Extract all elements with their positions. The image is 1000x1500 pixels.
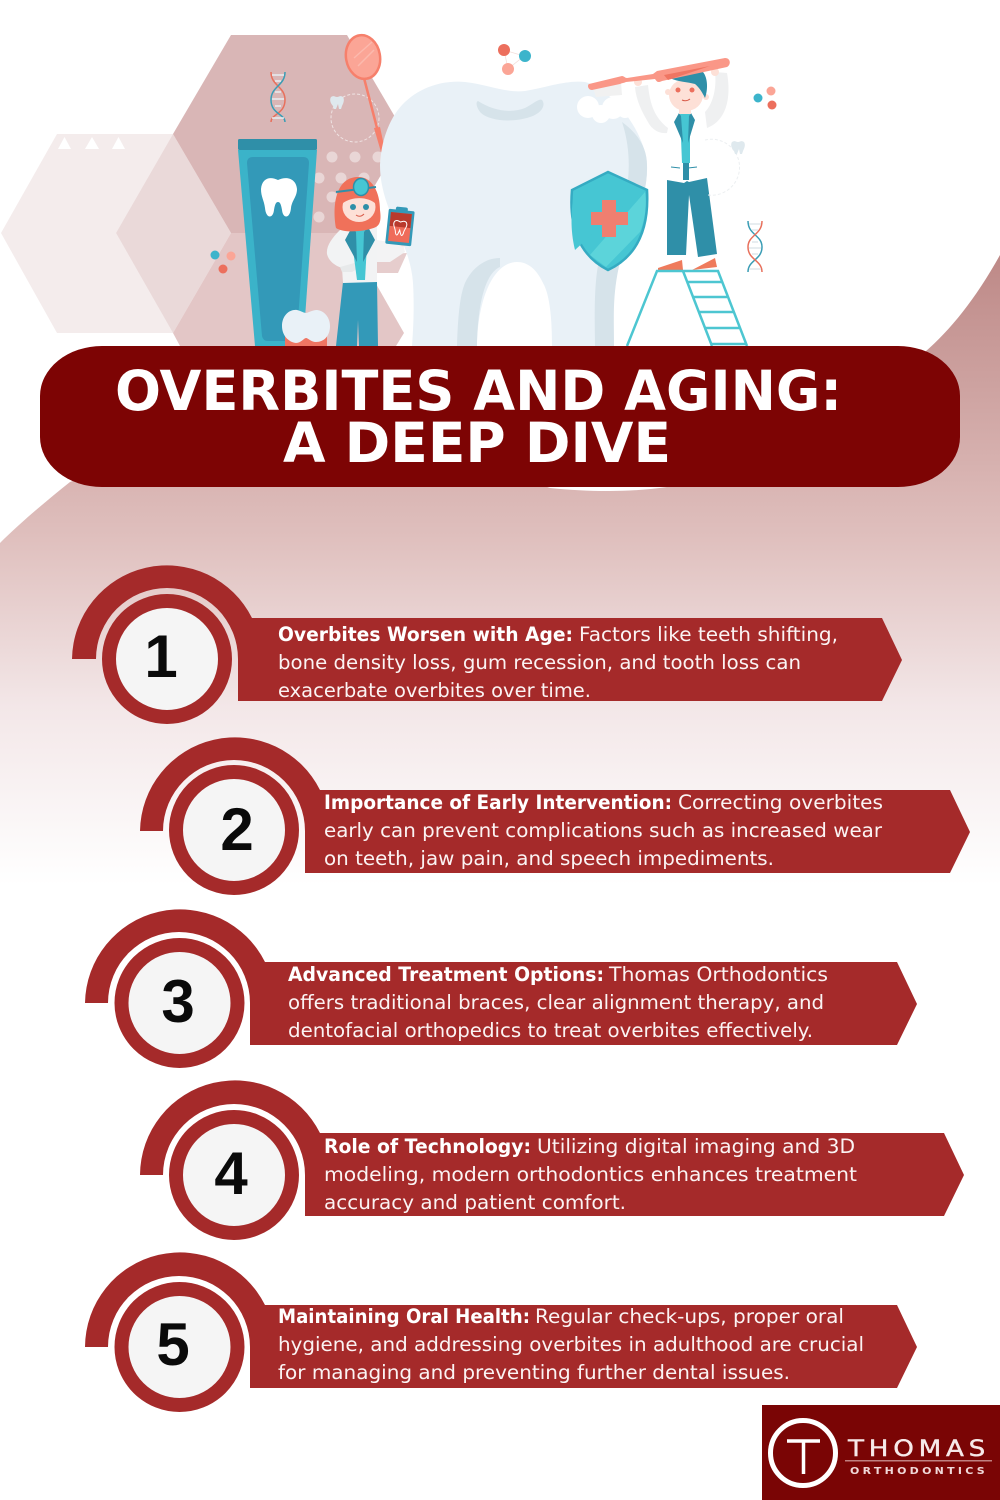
title banner xyxy=(40,346,960,487)
hands xyxy=(634,78,642,86)
step 5: 5 xyxy=(156,1311,190,1378)
step 3: 3 xyxy=(161,968,195,1035)
icon: clipboard with tooth xyxy=(385,206,415,246)
icon: dental mirror xyxy=(342,32,385,152)
toothbrush xyxy=(588,58,730,90)
illustration: giant tooth xyxy=(380,82,647,346)
coat sleeves xyxy=(635,85,668,133)
icon: small tooth at tube base xyxy=(282,310,330,346)
step 1: Overbites Worsen with Age: xyxy=(278,623,573,646)
step 1 xyxy=(72,565,902,717)
icon: dashed orbit with small tooth xyxy=(330,94,379,142)
step 4: accuracy and patient comfort. xyxy=(324,1191,626,1214)
step 3: dentofacial orthopedics to treat overbites effectively. xyxy=(288,1019,813,1042)
step 3: Advanced Treatment Options: xyxy=(288,963,604,986)
logo: Thomas Orthodontics xyxy=(762,1405,1000,1500)
step 3: offers traditional braces, clear alignment therapy, and xyxy=(288,991,824,1014)
icon: DNA right xyxy=(748,221,762,272)
ladder xyxy=(627,271,747,346)
icon: toothpaste tube xyxy=(238,139,317,346)
shoes xyxy=(658,258,717,270)
step 2: on teeth, jaw pain, and speech impediments. xyxy=(324,847,774,870)
step 4 xyxy=(140,1080,964,1233)
step 1: 1 xyxy=(144,623,178,690)
trousers xyxy=(667,178,717,257)
foam on tooth xyxy=(577,96,633,123)
step 4: Utilizing digital imaging and 3D xyxy=(537,1135,855,1158)
step 4: modeling, modern orthodontics enhances treatment xyxy=(324,1163,857,1186)
step 5: Maintaining Oral Health: xyxy=(278,1305,530,1328)
white curved top area xyxy=(0,0,1000,543)
title line 1: OVERBITES AND AGING: xyxy=(115,359,842,423)
step 2: 2 xyxy=(220,796,254,863)
step 2 xyxy=(140,737,970,888)
step 1: bone density loss, gum recession, and tooth loss can xyxy=(278,651,801,674)
hexagon backdrop xyxy=(1,35,407,346)
icon: DNA left xyxy=(271,72,285,122)
neck and face xyxy=(679,104,691,114)
step 1: exacerbate overbites over time. xyxy=(278,679,591,702)
icon: molecule left xyxy=(210,250,236,274)
step 4: 4 xyxy=(214,1140,248,1207)
step 4: Role of Technology: xyxy=(324,1135,531,1158)
step 3 xyxy=(85,909,917,1061)
illustration: dentist on ladder with toothbrush xyxy=(577,58,747,346)
step 5: for managing and preventing further dental issues. xyxy=(278,1361,790,1384)
rose gradient wash xyxy=(0,250,1000,890)
shirt and lapels xyxy=(680,113,690,163)
title line 2: A DEEP DIVE xyxy=(283,411,671,475)
icon: molecule right xyxy=(754,86,776,110)
step 3: Thomas Orthodontics xyxy=(608,963,828,986)
logo: Thomas Orthodontics: ORTHODONTICS xyxy=(850,1466,988,1477)
logo: Thomas Orthodontics: THOMAS xyxy=(847,1437,990,1462)
step 1: Factors like teeth shifting, xyxy=(579,623,838,646)
icon: shield with cross xyxy=(571,172,647,270)
step 2: Importance of Early Intervention: xyxy=(324,791,672,814)
bristles xyxy=(593,82,622,97)
step 5: Regular check-ups, proper oral xyxy=(535,1305,844,1328)
step 5: hygiene, and addressing overbites in adulthood are crucial xyxy=(278,1333,864,1356)
icon: molecule top xyxy=(498,44,531,75)
step 2: Correcting overbites xyxy=(678,791,883,814)
step 5 xyxy=(85,1252,917,1405)
step 2: early can prevent complications such as increased wear xyxy=(324,819,883,842)
illustration: female dentist xyxy=(327,177,406,346)
icon: dashed orbit right xyxy=(705,139,745,195)
